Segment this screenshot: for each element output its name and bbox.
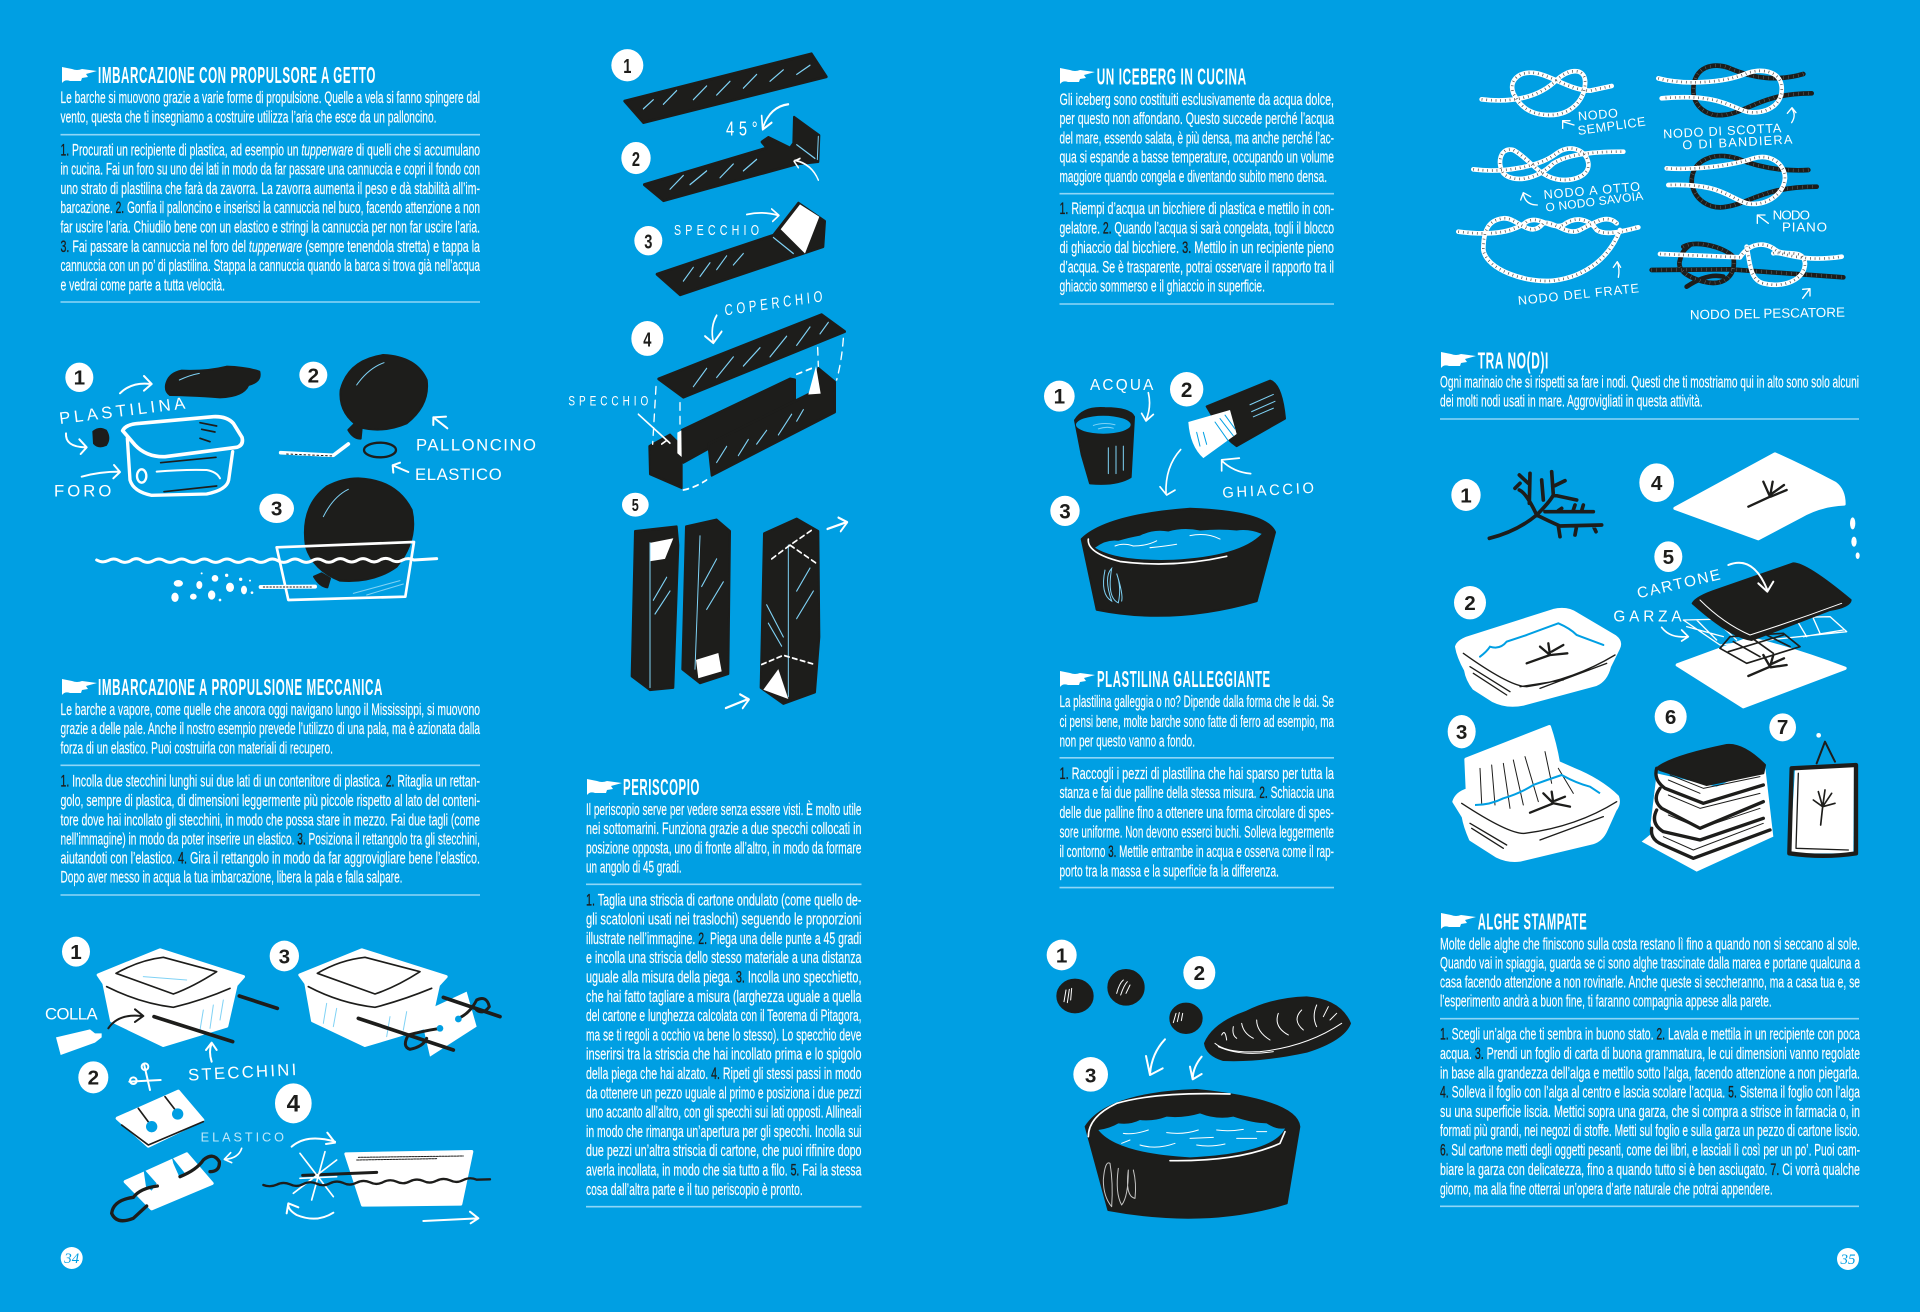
badge: step 2	[78, 1061, 108, 1093]
page number 35	[1837, 1248, 1859, 1270]
icon: pointing hand	[1441, 352, 1476, 368]
panel: periscopio	[586, 774, 862, 1207]
cardboard strip	[624, 54, 827, 123]
panel: alghe stampate: ALGHE STAMPATE	[1478, 908, 1587, 934]
label: nodo a otto o nodo savoia: NODO A OTTO	[1543, 180, 1641, 202]
panel: imbarcazione con propulsore a getto	[60, 62, 481, 302]
label: palloncino: PALLONCINO	[416, 436, 536, 455]
badge: step 2	[621, 142, 651, 174]
tray with lifted paper	[1454, 727, 1618, 860]
bowl with water	[1086, 1090, 1299, 1218]
badge: step 2	[299, 362, 327, 388]
badge: step 2	[1170, 372, 1203, 406]
intro text: qua si espande a basse temperature, occupando un volume	[1060, 149, 1334, 167]
plasticine balls	[1057, 970, 1202, 1033]
instructions text: d’acqua. Se è trasparente, potrai osservare il rapporto tra il	[1060, 258, 1334, 276]
instructions text: da ottenere un pezzo uguale al primo e posiziona i due pezzi	[586, 1084, 862, 1102]
intro text: La plastilina galleggia o no? Dipende dalla forma che le dai. Se	[1060, 693, 1334, 711]
label: 45 degrees: 45°	[726, 117, 758, 140]
badge: step 1: 1	[1460, 484, 1472, 507]
instructions text: del cartone e lunghezza calcolata con il Teorema di Pitagora,	[586, 1007, 862, 1025]
intro text: del mare, essendo salata, è più densa, ma anche perché l’ac-	[1060, 129, 1334, 147]
strip with mirror	[657, 203, 825, 295]
icon: pointing hand	[62, 67, 97, 83]
instructions text: averla incollata, in modo che sia tutto a filo. 5. Fai la stessa	[586, 1162, 862, 1180]
plasticine blob	[166, 367, 260, 397]
intro text	[60, 701, 481, 757]
instructions text	[1440, 1025, 1861, 1198]
badge: step 2: 2	[308, 364, 319, 387]
seaweed	[1489, 472, 1602, 538]
label: specchio: SPECCHIO	[674, 221, 759, 239]
instructions text	[1060, 200, 1334, 296]
badge: step 1	[1044, 381, 1075, 412]
intro text: nei sottomarini. Funziona grazie a due specchi collocati in	[586, 820, 862, 838]
badge: step 1	[1451, 479, 1481, 511]
badge: step 4: 4	[287, 1091, 301, 1118]
instructions text: inserirsi tra la striscia che hai incollato prima e lo spigolo	[586, 1046, 862, 1064]
instructions text	[1060, 765, 1335, 881]
label: specchio: SPECCHIO	[568, 393, 648, 409]
page number 34: 34	[63, 1251, 80, 1267]
label: foro: FORO	[54, 482, 111, 501]
icon: pointing hand	[1060, 671, 1095, 687]
panel: periscopio: PERISCOPIO	[623, 774, 700, 800]
badge: step 1	[65, 363, 93, 392]
badge: step 6	[1655, 700, 1687, 733]
badge: step 3: 3	[271, 498, 282, 521]
knot: nodo del pescatore	[1652, 244, 1843, 287]
folded strip	[644, 117, 819, 201]
heading: IMBARCAZIONE A PROPULSIONE MECCANICA	[98, 674, 383, 700]
badge: step 2: 2	[1181, 379, 1192, 402]
badge: step 1: 1	[74, 367, 85, 390]
badge: step 2: 2	[1194, 962, 1205, 985]
badge: step 3	[1448, 715, 1476, 748]
intro text: Le barche si muovono grazie a varie forme di propulsione. Quelle a vela si fanno spingere dal	[60, 89, 480, 107]
bubbles	[171, 572, 253, 602]
flattened plasticine	[1205, 997, 1350, 1060]
badge: step 3	[270, 941, 299, 971]
label: plastilina: PLASTILINA	[58, 394, 187, 428]
instructions text: cannuccia con un po’ di plastilina. Stappa la cannuccia quando la barca si trova già nell’acqua	[60, 257, 481, 275]
instructions text: due pezzi un’altra striscia di cartone, che puoi rifinire dopo	[586, 1142, 862, 1160]
label: nodo a otto o nodo savoia: O NODO SAVOIA	[1545, 189, 1644, 215]
badge: step 5	[622, 493, 649, 517]
instructions text: 1. Incolla due stecchini lunghi sui due lati di un contenitore di plastica. 2. Ritaglia un rettan-	[60, 773, 480, 791]
label: nodo semplice: NODO	[1577, 106, 1619, 124]
intro text: grazie a delle pale. Anche il nostro esempio prevede l’utilizzo di una pala, ma è azionata dalla	[60, 720, 481, 738]
heading: IMBARCAZIONE CON PROPULSORE A GETTO	[98, 62, 376, 88]
intro text: vento, questa che ti insegniamo a costruire utilizza l’aria che esce da un palloncino.	[60, 108, 436, 126]
instructions text: e incolla una striscia dello stesso materiale a una distanza	[586, 949, 862, 967]
label: nodo del pescatore: NODO DEL PESCATORE	[1690, 305, 1845, 322]
badge: step 2	[1183, 956, 1215, 989]
instructions text: uno strato di plastilina che farà da zavorra. La zavorra aumenta il peso e dà stabilità all’im-	[60, 180, 480, 198]
instructions text: aiutandoti con l’elastico. 4. Gira il rettangolo in modo da far aggrovigliare bene l’elastico.	[60, 850, 480, 868]
badge: step 3	[1073, 1057, 1108, 1092]
water drops	[1850, 517, 1860, 559]
badge: step 3	[1050, 496, 1080, 526]
instructions text: 4. Solleva il foglio con l’alga al centro e lascia scolare l’acqua. 5. Sistema il foglio con l’alga	[1440, 1084, 1861, 1102]
instructions text: 3. Fai passare la cannuccia nel foro del tupperware (sempre tenendola stretta) e tappa la	[60, 238, 481, 256]
intro text: Gli iceberg sono costituiti esclusivamente da acqua dolce,	[1060, 91, 1334, 109]
badge: step 2: 2	[88, 1067, 99, 1090]
label: nodo piano: PIANO	[1782, 220, 1827, 235]
instructions text: 1. Procurati un recipiente di plastica, ad esempio un tupperware di quelli che si accumulano	[60, 141, 480, 159]
periscope assembly	[638, 315, 845, 490]
instructions text	[60, 773, 480, 887]
label: stecchini: STECCHINI	[188, 1060, 297, 1085]
intro text	[1060, 91, 1335, 186]
instructions text: in modo che rimanga un’apertura per gli specchi. Incolla sui	[586, 1123, 862, 1141]
stack of books	[1642, 745, 1773, 872]
knot: nodo piano	[1667, 156, 1817, 207]
illustration: knots	[1458, 66, 1845, 322]
instructions text: il contorno 3. Mettile entrambe in acqua e osserva come il rap-	[1060, 843, 1334, 861]
icon: pointing hand	[587, 779, 622, 795]
badge: step 3: 3	[644, 230, 653, 253]
intro text: maggiore quando congela e diventando subito meno densa.	[1060, 168, 1327, 186]
label: nodo piano: NODO	[1773, 207, 1810, 222]
label: acqua: ACQUA	[1090, 377, 1154, 394]
instructions text: golo, sempre di plastica, di dimensioni leggermente più piccole rispetto al lato del conteni-	[60, 792, 480, 810]
intro text: non per questo vanno a fondo.	[1060, 732, 1195, 750]
intro text	[1060, 693, 1334, 750]
glue tube	[56, 1029, 102, 1055]
label: elastico: ELASTICO	[415, 465, 502, 484]
instructions text: che hai fatto tagliare a misura (larghezza uguale a quella	[586, 988, 862, 1006]
cup of water	[1075, 408, 1134, 484]
label: nodo piano	[1773, 207, 1827, 235]
badge: step 4: 4	[1651, 472, 1663, 495]
panel: un iceberg in cucina	[1060, 63, 1335, 304]
container with paddle	[300, 950, 500, 1057]
instructions text: e vedrai come parte a tutta velocità.	[60, 276, 225, 294]
instructions text: in cucina. Fai un foro su uno dei lati in modo da far passare una cannuccia e copri il fondo con	[60, 161, 480, 179]
icon: pointing hand	[1441, 913, 1476, 929]
label: nodo di scotta o di bandiera: NODO DI SCOTTA	[1663, 121, 1782, 141]
intro text	[1440, 935, 1861, 1011]
knot: nodo semplice	[1482, 71, 1612, 115]
label: elastico: ELASTICO	[201, 1131, 284, 1145]
page number 35: 35	[1840, 1252, 1856, 1268]
label: colla: COLLA	[45, 1004, 99, 1023]
intro text: forza di un elastico. Puoi costruirla con materiali di recupero.	[60, 739, 333, 757]
badge: step 5: 5	[632, 496, 639, 516]
cut rectangle	[117, 1091, 203, 1146]
label: nodo di scotta o di bandiera	[1663, 121, 1793, 152]
instructions text: tore dove hai incollato gli stecchini, in modo che possa stare in mezzo. Fai due tagli (come	[60, 811, 480, 829]
badge: step 7	[1769, 713, 1796, 741]
intro text	[1440, 374, 1859, 411]
instructions text: gelatore. 2. Quando l’acqua si sarà congelata, togli il blocco	[1060, 220, 1334, 238]
panel: alghe stampate	[1440, 908, 1861, 1206]
badge: step 3: 3	[279, 945, 290, 968]
badge: step 2: 2	[632, 148, 640, 170]
knot: nodo di scotta	[1658, 66, 1812, 115]
wet paper sheet with seaweed	[1675, 454, 1844, 539]
illustration: floating plasticine steps	[1047, 940, 1350, 1218]
panel: imbarcazione a propulsione meccanica	[60, 674, 481, 895]
illustration: periscope steps	[568, 49, 847, 708]
intro text	[586, 800, 862, 877]
instructions text: Dopo aver messo in acqua la tua imbarcazione, libera la pala e falla salpare.	[60, 869, 402, 887]
illustration: jet boat steps	[54, 355, 536, 602]
icon: pointing hand	[1060, 68, 1095, 84]
illustration: paddle boat steps	[45, 937, 500, 1223]
balloon boat on water	[97, 478, 437, 600]
label: nodo di scotta o di bandiera: O DI BANDIERA	[1682, 133, 1793, 152]
badge: step 1: 1	[1056, 944, 1067, 967]
badge: step 4	[275, 1083, 312, 1123]
label: garza: GARZA	[1613, 609, 1682, 626]
elastic band	[364, 443, 396, 457]
badge: step 1: 1	[623, 55, 632, 78]
instructions text: porto tra la massa e la superficie fa la differenza.	[1060, 863, 1279, 881]
instructions text: cosa dall’altra parte e il tuo periscopio è pronto.	[586, 1181, 803, 1199]
instructions text: delle due palline fino a ottenere una forma circolare di spes-	[1060, 804, 1334, 822]
panel: tra no(d)i	[1440, 347, 1859, 419]
intro text: ci pensi bene, molte barche sono fatte di ferro ad esempio, ma	[1060, 713, 1334, 731]
instructions text: sore uniforme. Non devono esserci buchi. Solleva leggermente	[1060, 824, 1334, 842]
instructions text: nell’immagine) in modo da poter inserire un elastico. 3. Posiziona il rettangolo tra gli stecchini,	[60, 830, 480, 848]
container with sticks	[98, 950, 277, 1045]
instructions text	[586, 891, 862, 1199]
instructions text: 1. Taglia una striscia di cartone ondulato (come quello de-	[586, 891, 862, 909]
badge: step 3: 3	[1085, 1064, 1096, 1087]
badge: step 4: 4	[643, 328, 652, 351]
instructions text	[60, 141, 481, 294]
instructions text: 1. Riempi d’acqua un bicchiere di plastica e mettilo in con-	[1060, 200, 1334, 218]
badge: step 3: 3	[1456, 721, 1467, 744]
badge: step 3	[259, 494, 294, 523]
instructions text: illustrate nell’immagine. 2. Piega una delle punte a 45 gradi	[586, 930, 862, 948]
instructions text: stanza e fai due palline della stessa misura. 2. Schiaccia una	[1060, 784, 1334, 802]
illustration: iceberg steps	[1044, 372, 1314, 616]
intro text: posizione opposta, uno di fronte all’altro, in modo da formare	[586, 839, 862, 857]
tilted cup with ice	[1188, 381, 1285, 458]
illustration: printed seaweed steps	[1448, 454, 1860, 872]
heading: UN ICEBERG IN CUCINA	[1097, 63, 1247, 89]
intro text	[60, 89, 480, 126]
badge: step 5: 5	[1663, 546, 1674, 569]
badge: step 5	[1654, 541, 1682, 572]
instructions text: uguale alla misura della piega. 3. Incolla uno specchietto,	[586, 968, 862, 986]
instructions text: far uscire l’aria. Chiudilo bene con un elastico e stringi la cannuccia per non far uscire l’aria.	[60, 219, 480, 237]
instructions text: della piega che hai alzato. 4. Ripeti gli stessi passi in modo	[586, 1065, 862, 1083]
label: nodo del frate: NODO DEL FRATE	[1517, 281, 1640, 308]
heading: TRA NO(D)I	[1478, 347, 1549, 373]
badge: step 1	[62, 937, 90, 967]
page number 34	[61, 1247, 83, 1269]
intro text: per questo non affondano. Questo succede perché l’acqua	[1060, 110, 1335, 128]
badge: step 2	[1454, 586, 1486, 619]
instructions text: 1. Raccogli i pezzi di plastilina che hai sparso per tutta la	[1060, 765, 1335, 783]
instructions text: uno accanto all’altro, con gli specchi sui lati opposti. Allineali	[586, 1104, 862, 1122]
badge: step 7: 7	[1777, 716, 1788, 739]
boat with paddle on water	[263, 1133, 490, 1223]
tupperware container	[123, 417, 242, 495]
instructions text: barcazione. 2. Gonfia il palloncino e inserisci la cannuccia nel buco, facendo attenzione a non	[60, 199, 480, 217]
panel: plastilina galleggiante	[1060, 666, 1335, 888]
rectangle with elastic	[112, 1154, 219, 1221]
badge: step 1	[1047, 940, 1077, 970]
intro text: Le barche a vapore, come quelle che ancora oggi navigano lungo il Mississippi, si muovono	[60, 701, 480, 719]
instructions text: ma se ti regoli a occhio va bene lo stesso). Lo specchio deve	[586, 1026, 862, 1044]
badge: step 6: 6	[1665, 706, 1676, 729]
label: coperchio: COPERCHIO	[724, 288, 823, 319]
framed seaweed print	[1789, 733, 1856, 856]
badge: step 3	[634, 226, 662, 255]
label: ghiaccio: GHIACCIO	[1222, 481, 1314, 502]
badge: step 4	[631, 321, 663, 356]
badge: step 2: 2	[1464, 592, 1476, 615]
instructions text: di ghiaccio dal bicchiere. 3. Mettilo in un recipiente pieno	[1060, 239, 1334, 257]
tray with seaweed	[1457, 610, 1619, 705]
knot: nodo a otto	[1473, 149, 1623, 180]
periscope halves and assembled	[632, 518, 847, 708]
panel: plastilina galleggiante: PLASTILINA GALLEGGIANTE	[1097, 666, 1271, 692]
straw	[281, 444, 348, 456]
badge: step 1	[611, 49, 643, 81]
badge: step 1: 1	[70, 941, 82, 964]
intro text: Il periscopio serve per vedere senza essere visti. È molto utile	[586, 800, 862, 819]
intro text: un angolo di 45 gradi.	[586, 859, 682, 877]
icon: pointing hand	[62, 679, 97, 695]
badge: step 1: 1	[1054, 385, 1065, 409]
knot: nodo del frate	[1458, 218, 1638, 281]
instructions text: ghiaccio sommerso e il ghiaccio in superficie.	[1060, 278, 1265, 296]
scissors	[129, 1063, 161, 1090]
badge: step 3: 3	[1059, 500, 1071, 524]
balloon	[340, 355, 427, 439]
badge: step 4	[1639, 463, 1674, 502]
tub with water	[1082, 509, 1275, 616]
intro text: dei molti nodi usati in mare. Aggrovigliati in questa attività.	[1440, 393, 1703, 411]
label: cartone: CARTONE	[1635, 567, 1722, 602]
paper, gauze and cardboard stack	[1677, 563, 1851, 707]
instructions text: gli scatoloni usati nei traslochi) seguendo le proporzioni	[586, 911, 862, 929]
label: nodo semplice: SEMPLICE	[1577, 115, 1646, 138]
